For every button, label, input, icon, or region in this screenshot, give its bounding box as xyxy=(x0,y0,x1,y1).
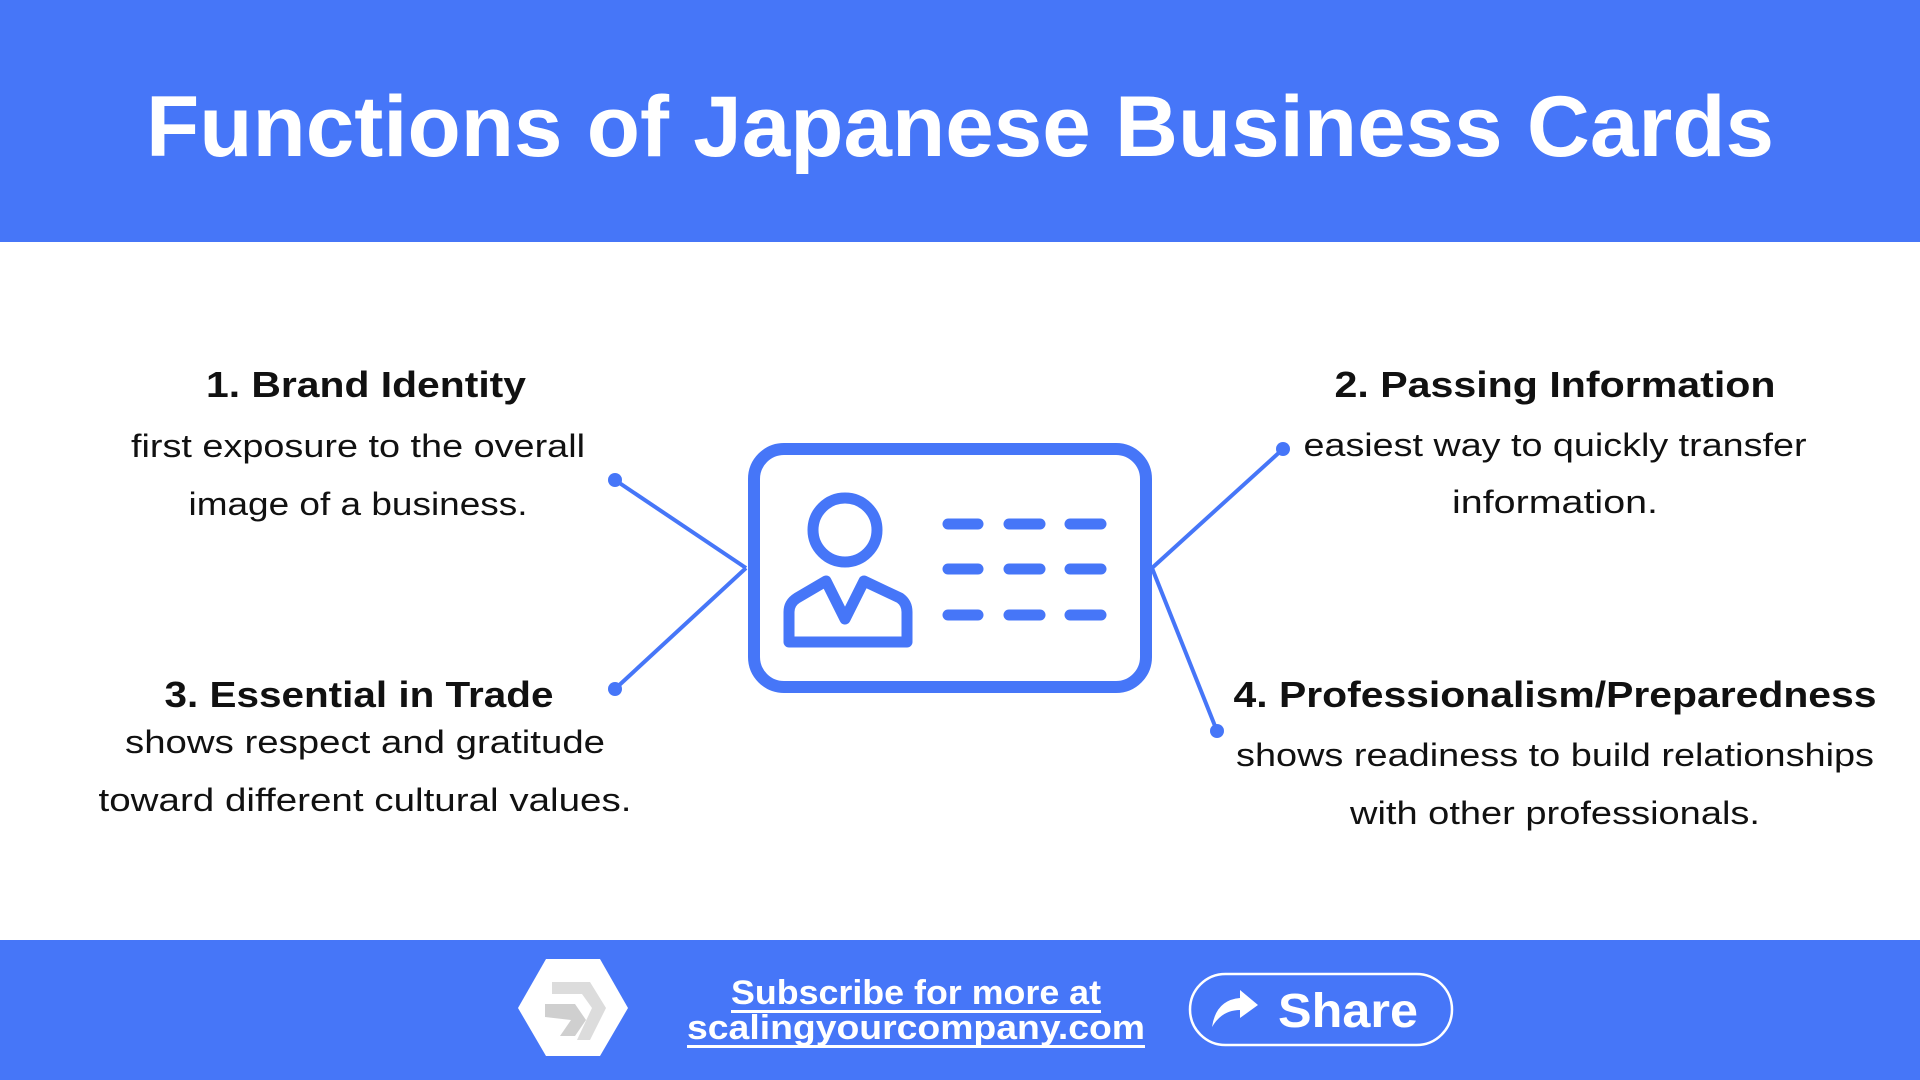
subscribe link: Subscribe for more at xyxy=(731,974,1101,1012)
share button: Share xyxy=(1278,985,1418,1038)
icon: business card xyxy=(754,449,1146,687)
text block 3 xyxy=(98,674,632,818)
text block 2: 2. Passing Information xyxy=(1334,364,1776,405)
subscribe link xyxy=(687,974,1145,1048)
text block 4: with other professionals. xyxy=(1349,795,1760,831)
text block 4: shows readiness to build relationships xyxy=(1236,737,1874,773)
connector dots xyxy=(608,442,1290,738)
text block 1: first exposure to the overall xyxy=(131,428,585,464)
text block 4: 4. Professionalism/Preparedness xyxy=(1234,674,1876,715)
text block 4 xyxy=(1234,674,1876,831)
text block 3: 3. Essential in Trade xyxy=(164,674,554,715)
connector lines xyxy=(615,449,1283,731)
text block 3: toward different cultural values. xyxy=(98,782,632,818)
footer band xyxy=(0,940,1920,1080)
header band xyxy=(0,0,1920,242)
subscribe link: scalingyourcompany.com xyxy=(687,1009,1145,1047)
logo xyxy=(518,959,628,1056)
text block 1 xyxy=(131,364,585,522)
text block 3: shows respect and gratitude xyxy=(125,724,605,760)
share button xyxy=(1190,974,1452,1045)
text block 2: information. xyxy=(1452,484,1658,520)
text block 2 xyxy=(1304,364,1807,520)
title: Functions of Japanese Business Cards xyxy=(146,79,1774,175)
text block 2: easiest way to quickly transfer xyxy=(1304,427,1807,463)
text block 1: 1. Brand Identity xyxy=(206,364,526,405)
text block 1: image of a business. xyxy=(188,486,528,522)
